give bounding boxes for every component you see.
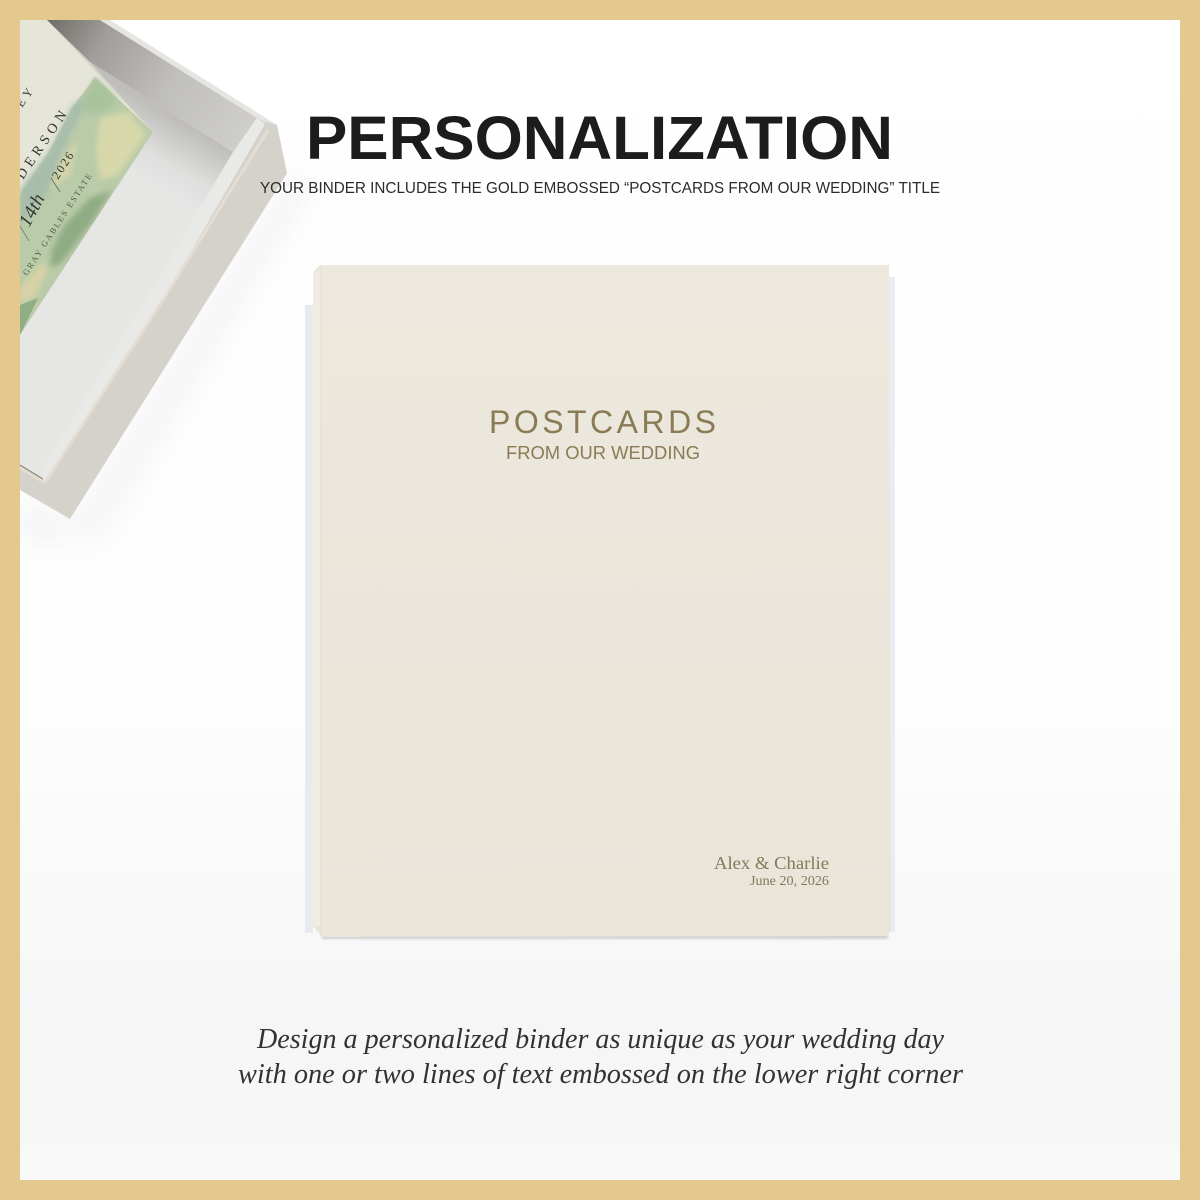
binder cover	[313, 265, 891, 937]
invitation text: DERSON	[14, 105, 73, 182]
binder spine hinge	[313, 272, 320, 926]
invitation text: 2026	[49, 148, 78, 182]
invitation text: EY	[13, 82, 38, 110]
invitation card	[13, 20, 153, 335]
subtitle: YOUR BINDER INCLUDES THE GOLD EMBOSSED “POSTCARDS FROM OUR WEDDING” TITLE	[260, 180, 940, 197]
caption: with one or two lines of text embossed on the lower right corner	[238, 1058, 964, 1090]
embossed names and date: Alex & Charlie	[714, 853, 829, 873]
embossed names and date	[714, 853, 829, 888]
title: PERSONALIZATION	[306, 104, 893, 172]
caption	[238, 1023, 964, 1090]
caption: Design a personalized binder as unique as your wedding day	[256, 1023, 944, 1055]
invitation text: 14th	[15, 190, 49, 230]
invitation text: GRAY GABLES ESTATE	[20, 170, 95, 277]
embossed names and date: June 20, 2026	[750, 873, 829, 888]
invitation text	[20, 87, 92, 275]
gold title on cover	[489, 404, 716, 463]
gold title on cover: FROM OUR WEDDING	[506, 443, 700, 463]
photo: open keepsake box with invitation	[20, 20, 287, 519]
binder	[305, 265, 895, 939]
gold title on cover: POSTCARDS	[489, 404, 716, 440]
